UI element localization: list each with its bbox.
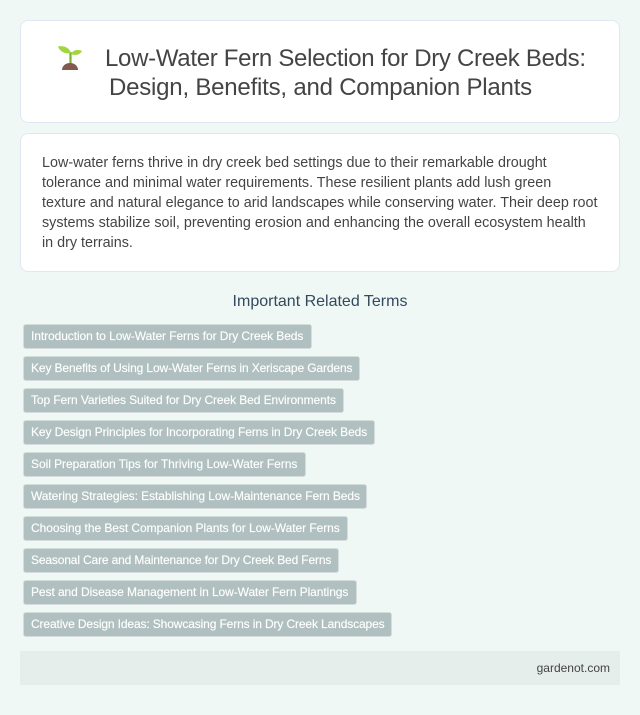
chip 6: Watering Strategies: Establishing Low-Maintenance Fern Beds (31, 489, 360, 503)
chip 2 (23, 356, 360, 381)
chip 8 (23, 548, 339, 573)
text block: intro paragraph: systems stabilize soil, preventing erosion and enhancing the overall ecosystem health (42, 215, 586, 231)
footer text: source: gardenot.com (537, 661, 610, 675)
icon: sprout (58, 46, 82, 70)
chip 3: Top Fern Varieties Suited for Dry Creek Bed Environments (31, 393, 336, 407)
title (105, 45, 586, 101)
chip 1 (23, 324, 312, 349)
title: Low-Water Fern Selection for Dry Creek Beds: (105, 45, 586, 72)
chip 4 (23, 420, 375, 445)
list: related term chips (23, 324, 392, 637)
chip 9: Pest and Disease Management in Low-Water Fern Plantings (31, 585, 348, 599)
chip 5: Soil Preparation Tips for Thriving Low-Water Ferns (31, 457, 297, 471)
chip 10 (23, 612, 392, 637)
chip 1: Introduction to Low-Water Ferns for Dry Creek Beds (31, 329, 303, 343)
chip 8: Seasonal Care and Maintenance for Dry Creek Bed Ferns (31, 553, 331, 567)
chip 10: Creative Design Ideas: Showcasing Ferns in Dry Creek Landscapes (31, 617, 385, 631)
chip 6 (23, 484, 367, 509)
chip 9 (23, 580, 357, 605)
chip 7: Choosing the Best Companion Plants for Low-Water Ferns (31, 521, 340, 535)
text block: intro paragraph: tolerance and minimal water requirements. These resilient plants add lush green (42, 175, 551, 191)
chip 5 (23, 452, 306, 477)
chip 4: Key Design Principles for Incorporating Ferns in Dry Creek Beds (31, 425, 367, 439)
text block: intro paragraph: in dry terrains. (42, 235, 133, 251)
text block: intro paragraph: Low-water ferns thrive in dry creek bed settings due to their remarkable drought (42, 155, 547, 171)
chip 7 (23, 516, 348, 541)
footer bar (20, 651, 620, 685)
text block: intro paragraph: texture and natural elegance to arid landscapes while conserving water. Their deep root (42, 195, 598, 211)
text block: intro paragraph (42, 155, 598, 251)
panel: intro text card (20, 133, 620, 272)
chip 3 (23, 388, 344, 413)
panel: title card (20, 20, 620, 123)
chip 2: Key Benefits of Using Low-Water Ferns in Xeriscape Gardens (31, 361, 352, 375)
heading: important related terms: Important Related Terms (233, 293, 407, 310)
title: Design, Benefits, and Companion Plants (109, 74, 532, 101)
